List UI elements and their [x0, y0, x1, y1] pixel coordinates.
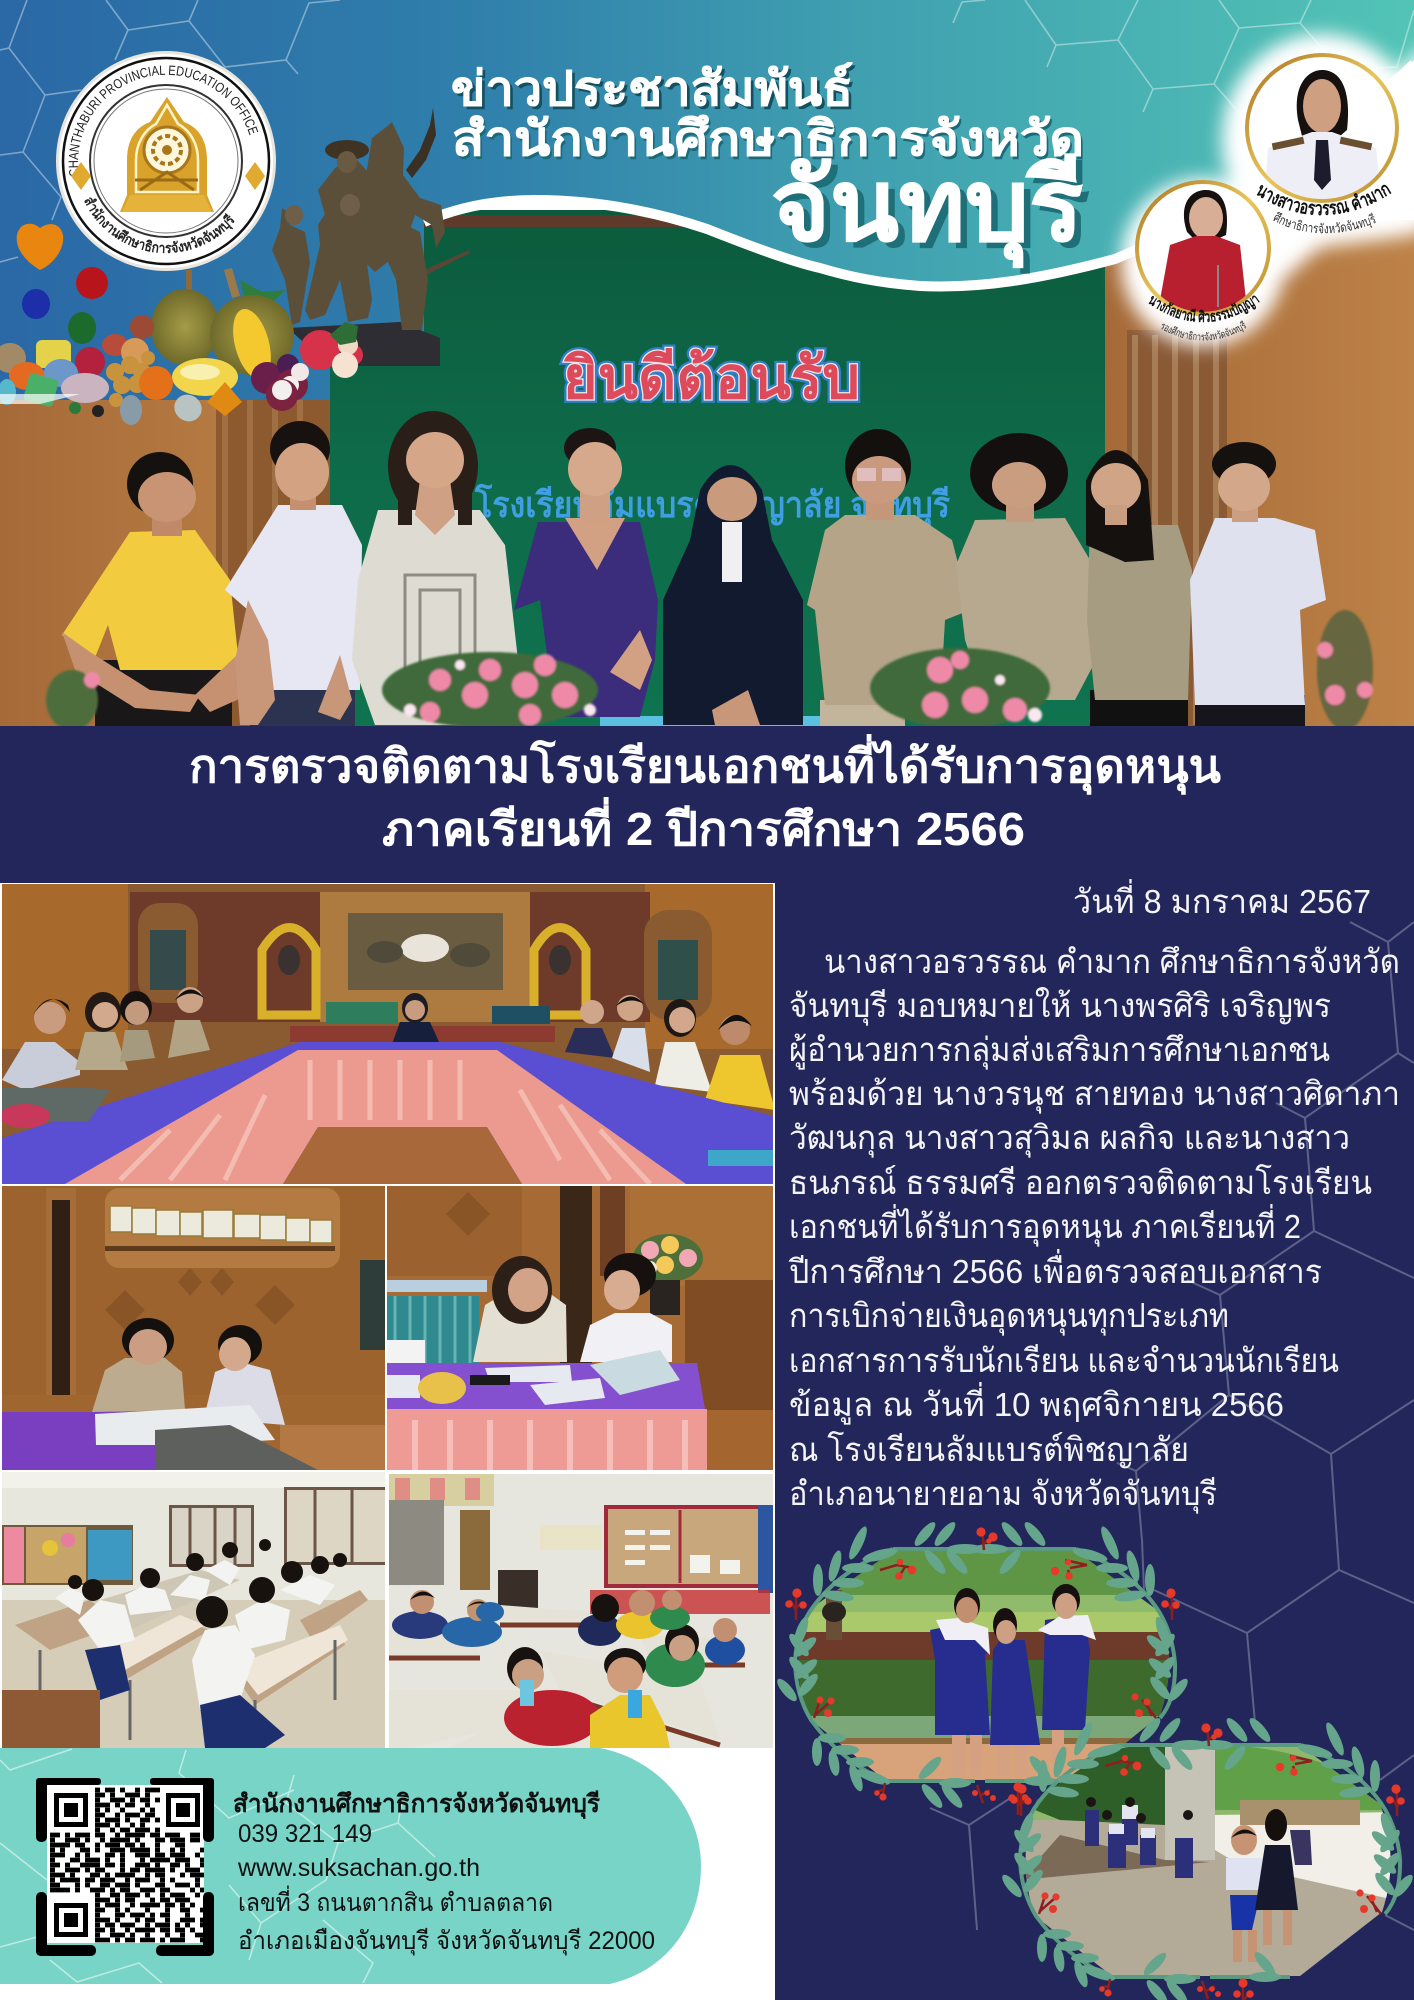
person 5 sister in navy	[663, 465, 803, 725]
title line 2: สำนักงานศึกษาธิการจังหวัด	[452, 113, 1084, 166]
framed photo: three students	[774, 1519, 1191, 1815]
small students group	[1085, 1810, 1193, 1878]
article body text: ธนภรณ์ ธรรมศรี ออกตรวจติดตามโรงเรียน	[789, 1164, 1372, 1201]
main heading	[189, 734, 1222, 855]
article body text: พร้อมด้วย นางวรนุช สายทอง นางสาวศิดาภา	[789, 1075, 1400, 1114]
header title	[451, 62, 1090, 274]
portrait 2 caption	[1148, 296, 1260, 340]
fruit and gem cluster	[0, 224, 363, 427]
seal diamonds	[71, 162, 91, 190]
article body text: จันทบุรี มอบหมายให้ นางพรศิริ เจริญพร	[789, 987, 1331, 1026]
welcome sign: ยินดีต้อนรับ	[563, 346, 860, 411]
person 3 patterned blouse	[352, 411, 518, 725]
person 6 khaki uniform	[807, 429, 970, 726]
hero photo: group at welcome board	[0, 210, 1414, 730]
small tropical fruits	[102, 315, 363, 411]
article body text: เอกชนที่ได้รับการอุดหนุน ภาคเรียนที่ 2	[789, 1204, 1301, 1247]
purple table with pink skirt	[2, 1042, 773, 1184]
portrait 2 caption: รองศึกษาธิการจังหวัดจันทบุรี	[1162, 320, 1246, 340]
person 1 yellow	[62, 452, 248, 726]
article body text: เอกสารการรับนักเรียน และจำนวนนักเรียน	[789, 1342, 1339, 1379]
woman in white uniform	[580, 1253, 672, 1362]
students	[392, 1590, 745, 1748]
title line 3: จันทบุรี	[778, 157, 1090, 274]
person 7 striped shirt	[956, 433, 1096, 700]
woman in patterned blouse	[473, 1256, 567, 1362]
portrait: provincial education officer	[1245, 53, 1399, 234]
person 2 white uniform	[225, 421, 362, 726]
wall boards	[2, 1525, 133, 1585]
woman in khaki	[92, 1318, 185, 1412]
article body text: ณ โรงเรียนลัมแบรต์พิชญาลัย	[789, 1431, 1189, 1468]
photo: students drinking milk	[389, 1474, 773, 1748]
title line 1: ข่าวประชาสัมพันธ์	[451, 62, 853, 116]
photo: document review left	[2, 1186, 385, 1470]
office seal logo	[56, 51, 276, 271]
footer contact panel	[0, 1748, 701, 1984]
welcome sign: โรงเรียนลัมแบรต์พิชญาลัย จันทบุรี	[474, 483, 951, 528]
framed photo: students walking	[999, 1715, 1414, 2000]
student right	[1038, 1584, 1096, 1760]
person 8 long hair khaki	[1086, 450, 1192, 726]
contact details: 039 321 149	[238, 1820, 372, 1848]
desks and students	[2, 1539, 368, 1750]
article body text: ผู้อำนวยการกลุ่มส่งเสริมการศึกษาเอกชน	[789, 1031, 1330, 1070]
article body text: วันที่ 8 มกราคม 2567	[1073, 879, 1371, 920]
bulletin board	[604, 1505, 773, 1593]
article body text: ข้อมูล ณ วันที่ 10 พฤศจิกายน 2566	[789, 1382, 1284, 1425]
gold emblem	[120, 97, 214, 212]
photo: classroom with students at desks	[2, 1472, 385, 1750]
title line 2: สำนักงานศึกษาธิการจังหวัด	[454, 116, 1086, 169]
hexagon lines in navy column	[930, 922, 1414, 1930]
article body text: วัฒนกุล นางสาวสุวิมล ผลกิจ และนางสาว	[789, 1119, 1350, 1158]
seated people left	[2, 987, 210, 1090]
seated people right	[565, 995, 775, 1110]
foreground students	[1226, 1825, 1264, 1962]
flower arrangements	[46, 610, 1373, 730]
seated person centre	[392, 993, 440, 1044]
portrait 1 caption	[1256, 184, 1392, 234]
portrait 1 caption: นางสาวอรวรรณ คำมาก	[1256, 184, 1392, 216]
title line 3: จันทบุรี	[771, 151, 1083, 268]
portrait 1 caption: ศึกษาธิการจังหวัดจันทบุรี	[1273, 212, 1376, 234]
person 9 white uniform	[1190, 442, 1326, 726]
main heading: การตรวจติดตามโรงเรียนเอกชนที่ได้รับการอุดหนุน	[189, 734, 1222, 795]
person 4 purple silk	[514, 428, 658, 717]
welcome sign: ยินดีต้อนรับ	[563, 346, 860, 411]
group of nine staff	[62, 411, 1326, 726]
contact details: สำนักงานศึกษาธิการจังหวัดจันทบุรี	[233, 1790, 601, 1820]
windows	[169, 1487, 385, 1567]
article body text	[788, 879, 1400, 1514]
photo: document review right	[387, 1186, 773, 1470]
student left	[930, 1588, 990, 1744]
main heading: ภาคเรียนที่ 2 ปีการศึกษา 2566	[382, 797, 1025, 855]
statue monument	[272, 108, 470, 366]
contact details	[233, 1790, 655, 1956]
flower bouquet	[633, 1234, 703, 1315]
contact details: www.suksachan.go.th	[237, 1854, 480, 1882]
desks	[498, 1605, 538, 1620]
portrait 2 caption: นางกัลยาณี ศิวธรรมปัญญา	[1148, 296, 1260, 322]
gemstones	[0, 224, 242, 427]
white glow behind portraits	[1121, 34, 1414, 346]
photo: meeting table	[0, 884, 775, 1184]
student middle	[990, 1608, 1040, 1745]
title line 1: ข่าวประชาสัมพันธ์	[454, 65, 856, 119]
article body text: อำเภอนายายอาม จังหวัดจันทบุรี	[789, 1475, 1217, 1514]
article body text: การเบิกจ่ายเงินอุดหนุนทุกประเภท	[789, 1297, 1229, 1336]
portrait: deputy education officer	[1135, 180, 1271, 340]
woman in white uniform	[204, 1325, 285, 1425]
welcome sign	[474, 346, 951, 528]
seal lettering: สำนักงานศึกษาธิการจังหวัดจันทบุรี	[84, 197, 234, 254]
contact details: อำเภอเมืองจันทบุรี จังหวัดจันทบุรี 22000	[238, 1927, 655, 1956]
seal lettering: CHANTHABURI PROVINCIAL EDUCATION OFFICE	[68, 66, 258, 176]
contact details: เลขที่ 3 ถนนตากสิน ตำบลตลาด	[238, 1885, 553, 1917]
seal lettering	[68, 66, 258, 254]
QR code	[36, 1778, 214, 1956]
board and wooden walls	[0, 210, 1414, 726]
hexagon pattern	[0, 0, 1414, 262]
header banner with wave	[0, 0, 1414, 400]
article body text: ปีการศึกษา 2566 เพื่อตรวจสอบเอกสาร	[788, 1249, 1322, 1290]
durians	[151, 268, 294, 396]
navy title band and right column	[0, 726, 1414, 2000]
